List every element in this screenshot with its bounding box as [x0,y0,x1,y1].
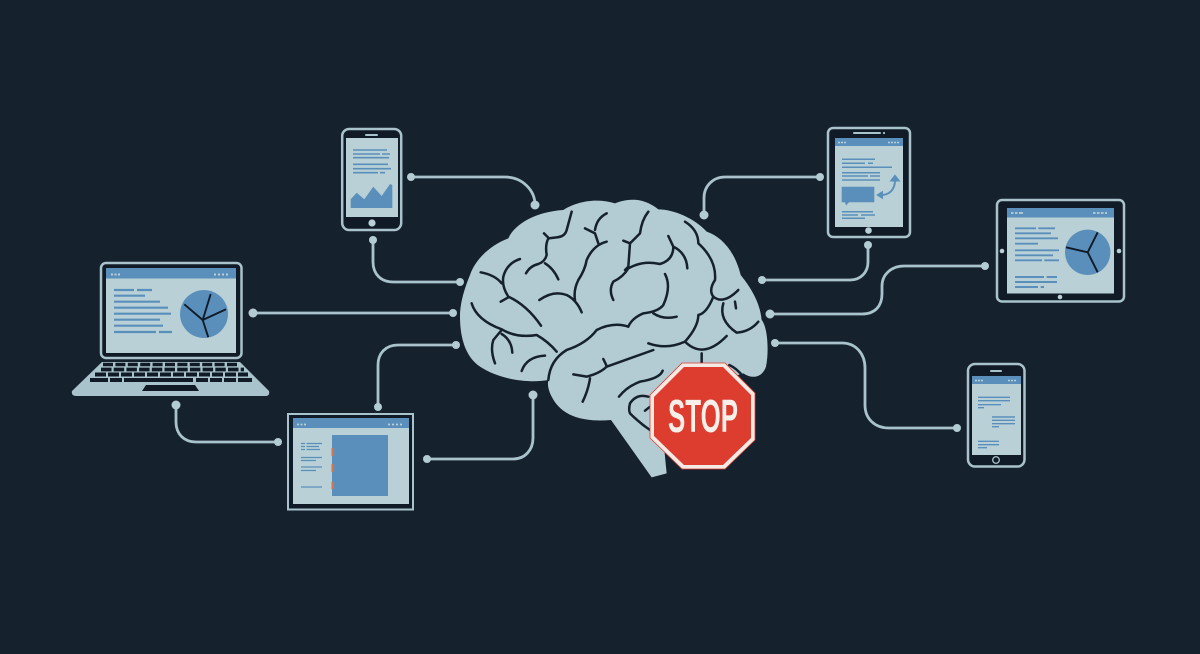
stop sign [650,363,755,469]
tablet body [828,128,910,237]
tablet home button [865,227,872,234]
phone speaker [365,134,378,136]
laptop screen [106,268,236,353]
device: right phone [968,364,1024,466]
tablet pie chart [1065,230,1110,275]
tablet side and bottom buttons [1000,249,1121,299]
connector: desktop tablet right to brain [423,390,538,463]
connector: top-left phone to brain [407,173,540,210]
tablet speech bubble [842,187,874,206]
tablet curved arrow [878,176,898,198]
connector: right phone to brain [771,339,961,432]
device: top-left phone [342,129,401,230]
connector: laptop to desktop tablet [172,400,282,446]
tablet text lines [301,444,322,487]
brain silhouette [460,200,768,477]
phone body [968,364,1024,466]
device: desktop tablet [288,414,413,510]
laptop touchpad [142,385,199,391]
tablet frame [288,414,413,510]
tablet header bar [835,138,903,146]
tablet header bar [1007,208,1114,218]
phone screen [972,376,1021,455]
connector: right tablet to brain [766,262,989,318]
tablet text lines [1015,228,1059,287]
connector lines [172,173,989,463]
brain [460,200,768,477]
connector: phone bottom to brain [369,236,464,286]
tablet body [997,200,1124,302]
device: top-right tablet [828,128,910,237]
phone screen [346,138,398,217]
tablet speaker [853,132,881,134]
phone home button [368,219,376,227]
tablet orange tabs [332,448,334,489]
connector: laptop to brain [248,308,457,318]
device: right tablet [997,200,1124,302]
tablet screen [1007,208,1114,294]
tablet screen [835,138,903,227]
tablet text lines [842,159,892,218]
phone home button [993,457,999,463]
tablet screen [293,418,409,504]
tablet document panel [332,435,388,496]
laptop header bar [106,268,236,278]
octagon [650,363,755,469]
laptop lid [101,263,242,358]
tablet header bar [293,418,409,428]
laptop pie chart [180,290,228,338]
phone text lines [978,397,1015,448]
brain folds [472,212,758,430]
connector: desktop tablet top to brain [374,341,460,411]
connector: top-right tablet to brain [700,173,824,220]
laptop keyboard [90,364,252,380]
stop label: STOP [668,390,738,442]
connector: top-right tablet bottom to brain [758,241,872,284]
device: laptop [72,263,269,396]
phone area chart [351,184,392,208]
phone speaker [990,370,1002,372]
phone body [342,129,401,230]
laptop base [72,362,269,396]
phone header bar [972,376,1021,384]
phone text lines [353,150,391,173]
laptop text lines [114,290,172,332]
